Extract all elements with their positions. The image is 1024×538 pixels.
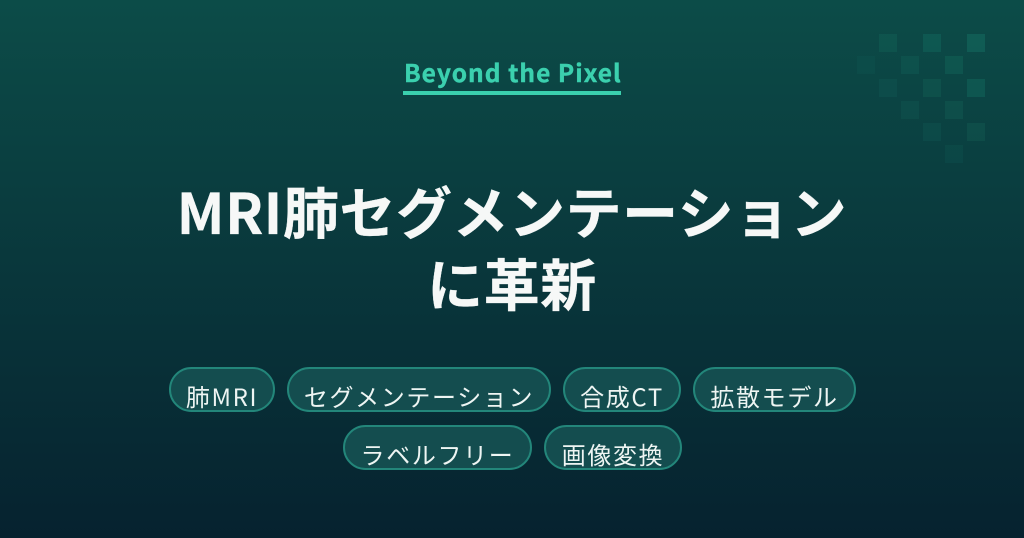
tag: 肺MRI: 肺MRI	[186, 378, 258, 413]
decorative square pattern	[879, 34, 985, 141]
tag: 合成CT: 合成CT	[580, 378, 664, 413]
tag: 肺MRI	[169, 367, 275, 412]
tag: 合成CT	[563, 367, 681, 412]
title: MRI肺セグメンテーション	[177, 170, 847, 251]
tag: ラベルフリー: ラベルフリー	[361, 436, 514, 471]
eyebrow label: Beyond the Pixel: Beyond the Pixel	[404, 55, 622, 90]
tag: 拡散モデル	[693, 367, 856, 412]
tag: 拡散モデル: 拡散モデル	[710, 378, 839, 413]
tag: 画像変換	[544, 425, 682, 470]
title	[177, 170, 847, 323]
tag: セグメンテーション	[287, 367, 551, 412]
tag: ラベルフリー	[343, 425, 532, 470]
tag: 画像変換: 画像変換	[562, 436, 664, 471]
tag: セグメンテーション: セグメンテーション	[304, 378, 534, 413]
title: に革新	[427, 242, 597, 323]
